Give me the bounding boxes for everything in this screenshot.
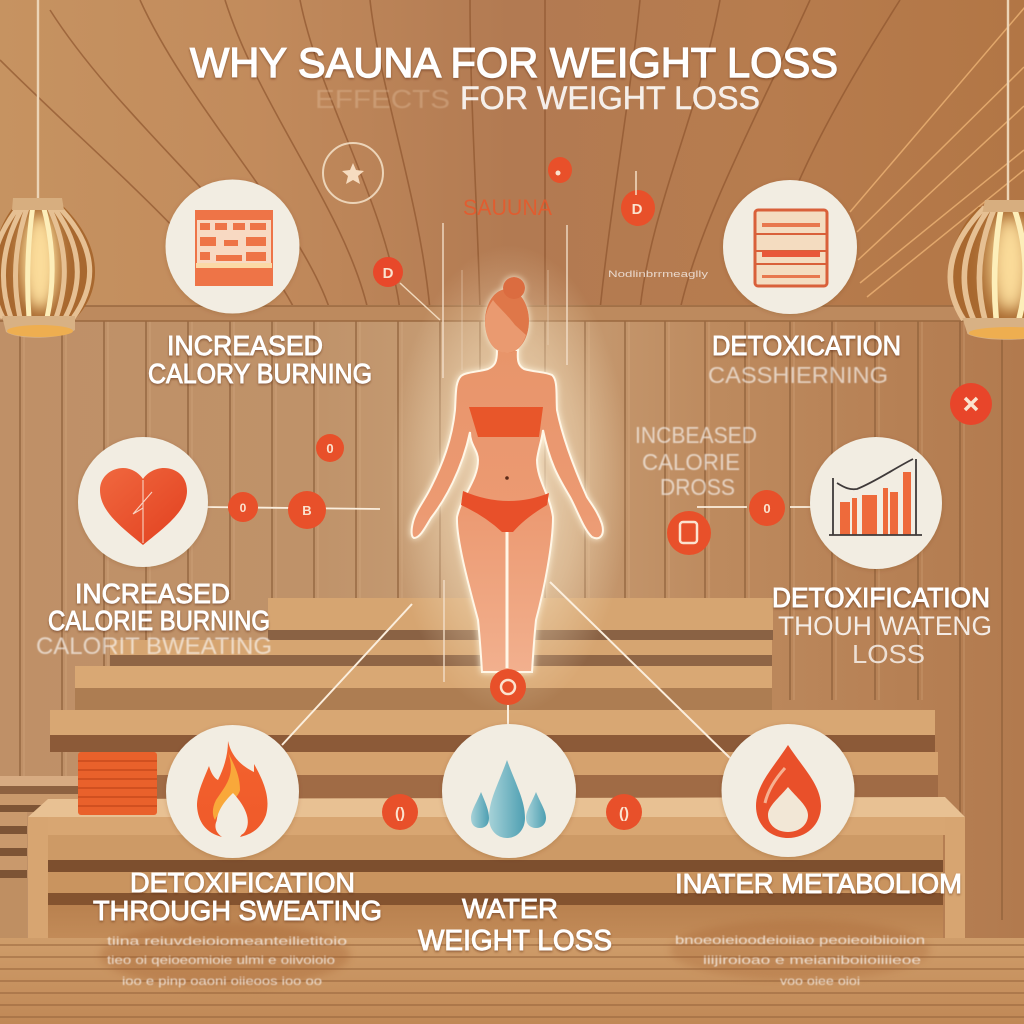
small description: left (107, 934, 347, 988)
label: increased calorie burning: CALORIT BWEATING (36, 633, 272, 660)
label: water weight loss: WATER (462, 893, 558, 924)
label: detoxication (708, 330, 901, 388)
faded centre-right label: INCBEASED (635, 422, 757, 448)
right hanging lantern (950, 0, 1024, 340)
label: increased calorie burning: INCREASED (75, 578, 230, 609)
left lower marker: () (395, 805, 405, 822)
ceiling markers and connectors: D (383, 265, 394, 282)
small description: left: tieo oi qeioeomioie ulmi e oiivoioio (107, 953, 335, 967)
right lower marker: () (619, 805, 629, 822)
small description: right: voo oiee oioi (780, 974, 860, 988)
right wall marker (950, 383, 992, 425)
icon: calorie grid (166, 180, 300, 314)
label: increased calorie burning: CALORIE BURNING (48, 605, 270, 636)
subtitle: FOR WEIGHT LOSS (460, 80, 760, 116)
label: increased calory burning: INCREASED (167, 330, 323, 361)
faded centre-right label: DROSS (660, 474, 735, 500)
ceiling markers and connectors: Nodlinbrrmeaglly (608, 269, 709, 279)
label: inater metaboliom: INATER METABOLIOM (675, 868, 962, 899)
back wall with vertical planks (0, 305, 1024, 940)
icon: flame (166, 725, 299, 858)
icon: bar chart: 0 (763, 501, 771, 516)
floor (0, 920, 1024, 1024)
faded subtitle prefix: EFFECTS (315, 84, 450, 114)
small description: right (675, 933, 925, 988)
icon: heart with connector markers (78, 437, 380, 567)
right lower marker (606, 794, 642, 830)
icon: metabolism drop (722, 724, 854, 857)
icon: bar chart (667, 437, 942, 569)
small description: left: tiina reiuvdeioiomeanteilietitoio (107, 934, 347, 948)
central figure in bikini (412, 277, 603, 672)
star badge on ceiling (323, 143, 383, 203)
glow behind figure (390, 245, 630, 715)
label: detoxication: CASSHIERNING (708, 362, 888, 388)
small description: right: iiijiroioao e meianiboiioiiiieoe (703, 953, 921, 967)
ceiling (0, 0, 1024, 310)
small marker: 0 (326, 441, 334, 456)
icon: heart with connector markers: 0 (240, 501, 247, 515)
label: detoxification through sweating: DETOXIFICATION (130, 867, 355, 898)
label: detoxification through sweating (93, 867, 382, 926)
faded centre-right label: CALORIE (642, 449, 740, 475)
label: detoxification through water loss: LOSS (852, 639, 925, 669)
sauna benches (0, 598, 965, 938)
faded centre-right label (635, 422, 757, 500)
label: increased calory burning (148, 330, 372, 389)
label: detoxification through water loss: THOUH WATENG (778, 611, 992, 641)
left lower marker (382, 794, 418, 830)
bottom centre marker (490, 669, 526, 705)
icon: heart with connector markers: B (302, 503, 312, 518)
label: detoxification through sweating: THROUGH SWEATING (93, 895, 382, 926)
bottom connector lines (282, 582, 730, 758)
icon: detox list (723, 180, 857, 314)
small description: left: ioo e pinp oaoni oiieoos ioo oo (122, 974, 322, 988)
label: water weight loss: WEIGHT LOSS (418, 925, 612, 957)
label: detoxification through water loss (772, 582, 992, 669)
label: detoxification through water loss: DETOXIFICATION (772, 582, 990, 613)
label: increased calorie burning (36, 578, 272, 660)
label: detoxication: DETOXICATION (712, 330, 901, 361)
small marker (316, 434, 344, 462)
faded sauna label: SAUUNA (463, 195, 552, 220)
orange folded towel (78, 752, 157, 815)
label: water weight loss (418, 893, 612, 957)
ceiling markers and connectors: D (632, 201, 643, 218)
title: WHY SAUNA FOR WEIGHT LOSS (190, 39, 838, 86)
ceiling markers and connectors (373, 157, 709, 682)
label: increased calory burning: CALORY BURNING (148, 358, 372, 389)
icon: water drops (442, 724, 576, 858)
small description: right: bnoeoieioodeioiiao peoieoibiioiion (675, 933, 925, 947)
left hanging lantern (0, 0, 95, 338)
